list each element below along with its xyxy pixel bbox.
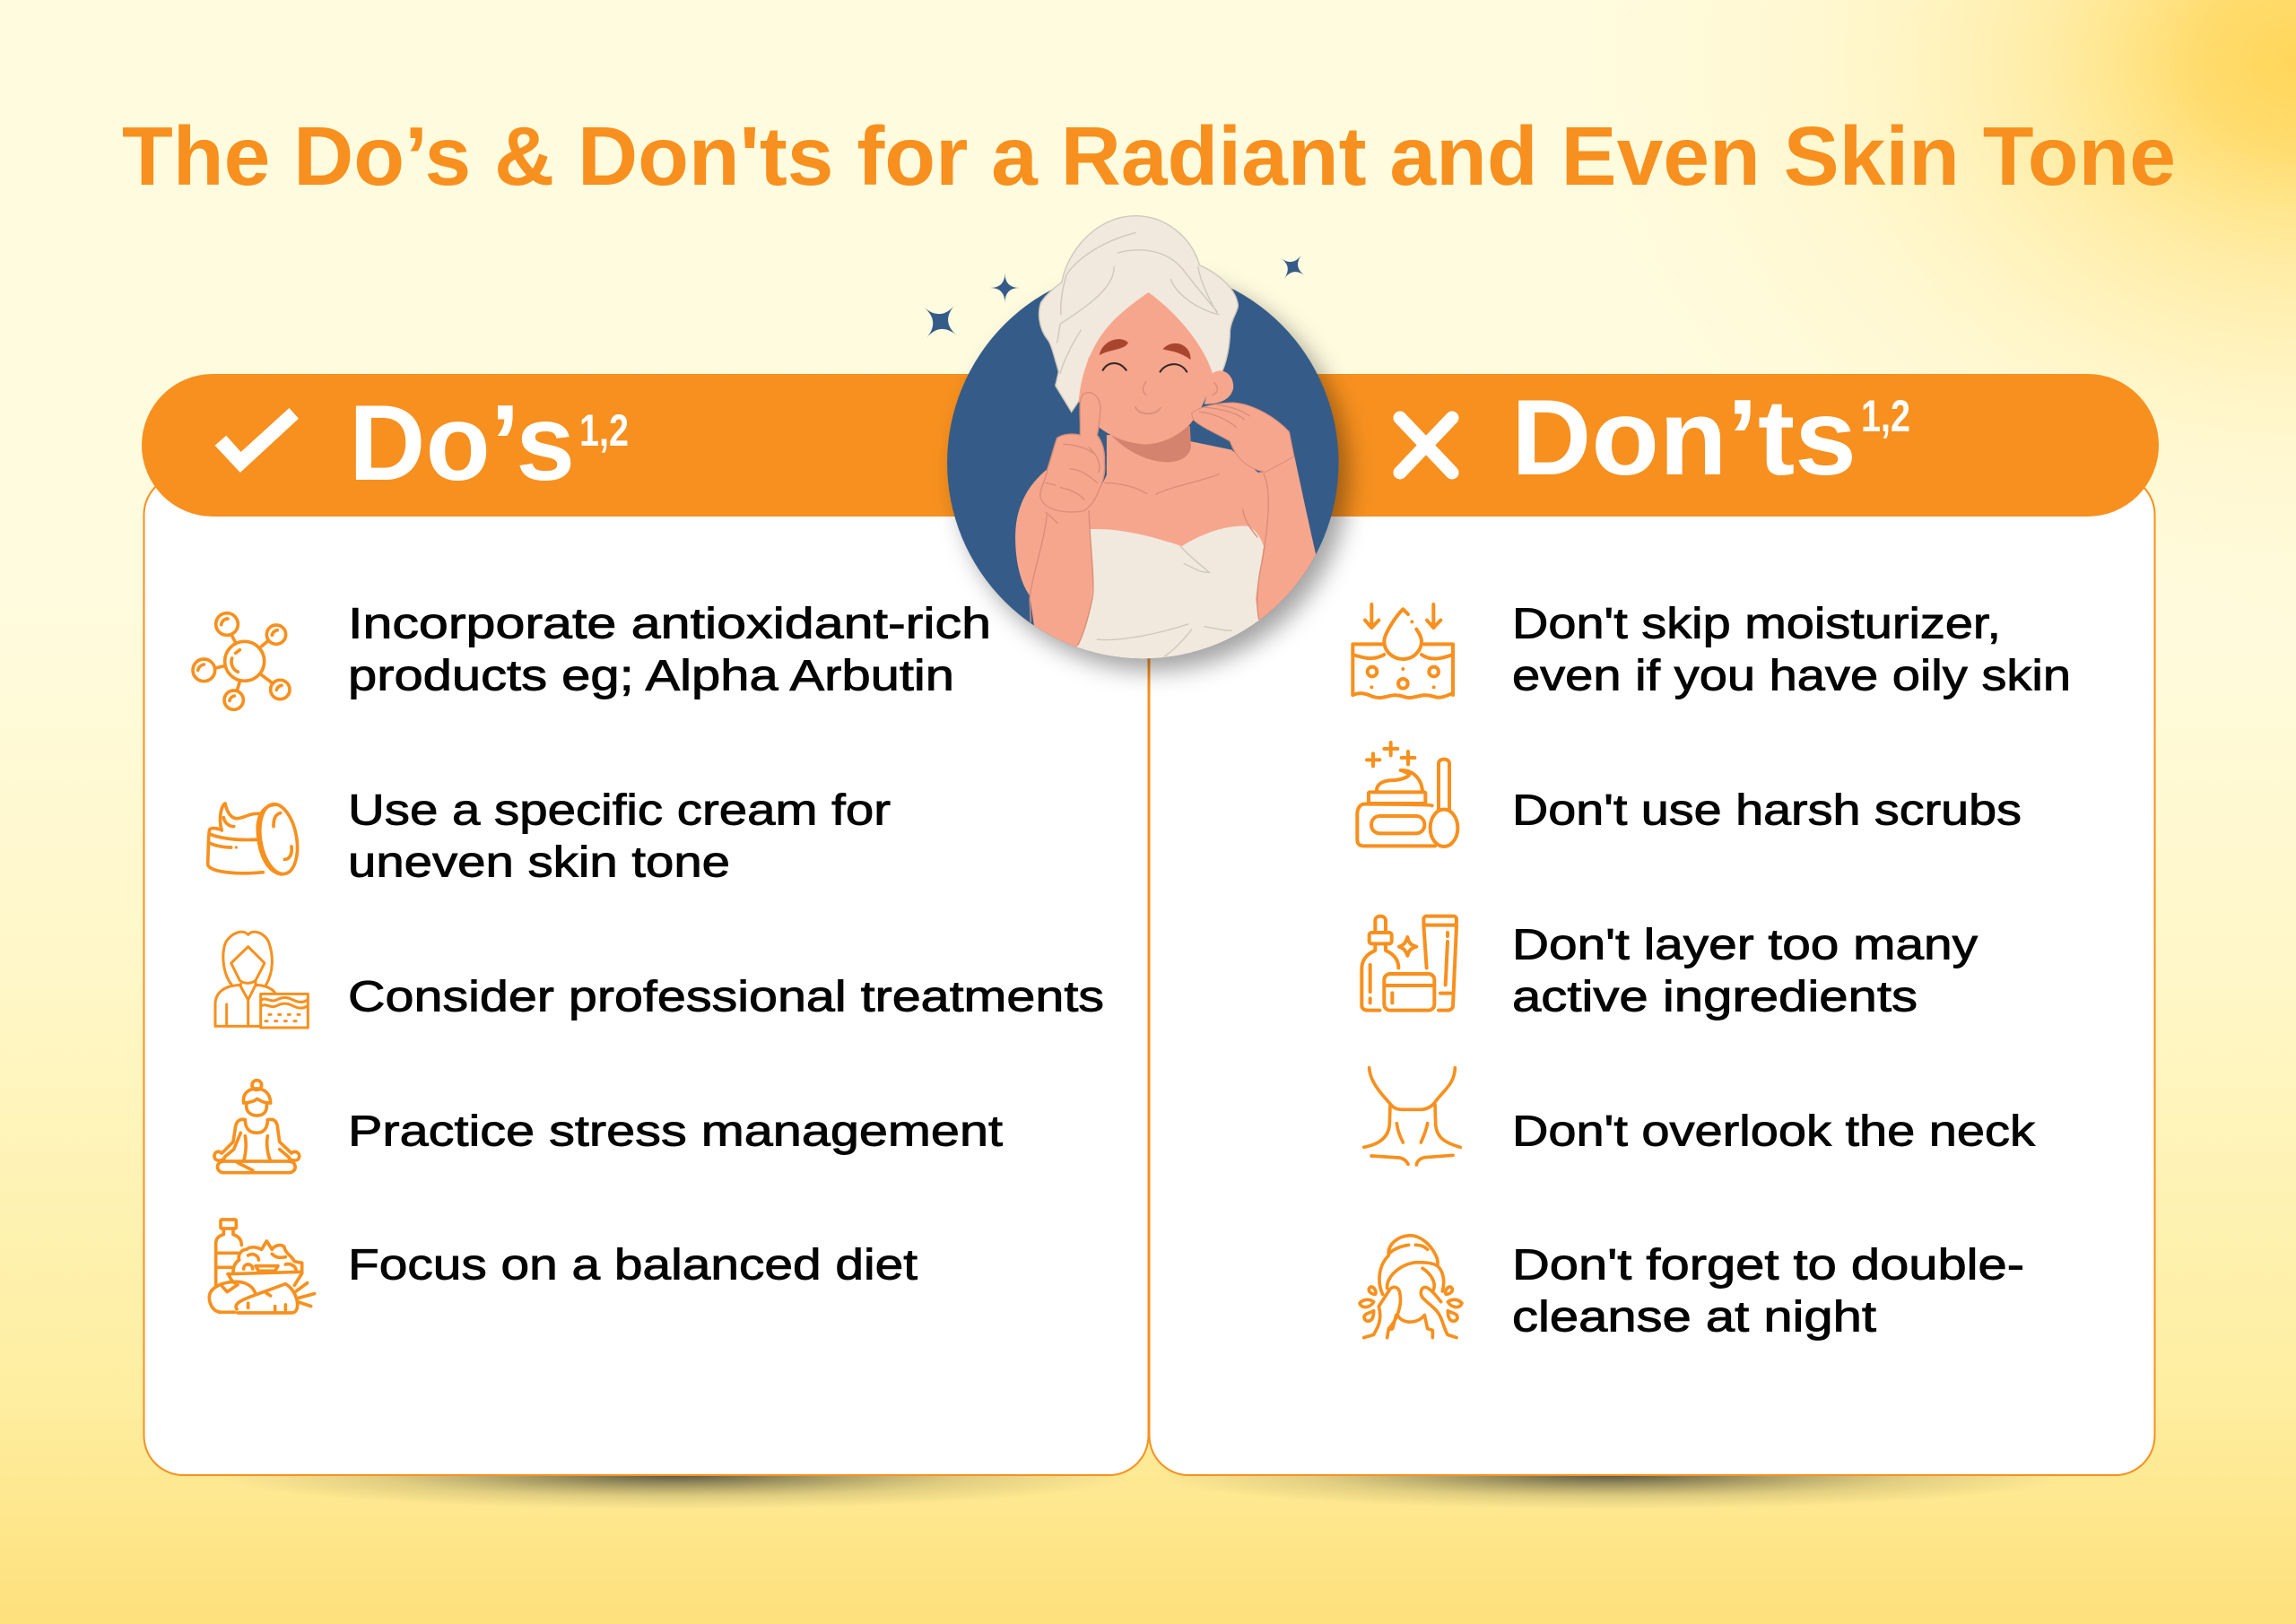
do's references: 1,2 <box>579 405 629 456</box>
icon: scrub jar and spoon <box>1357 743 1457 847</box>
item: balanced diet <box>209 1220 918 1313</box>
item: active ingredients: active ingredients <box>1512 974 1918 1020</box>
item: moisturizer <box>1352 601 2071 699</box>
towel wrap <box>1070 526 1264 666</box>
text: Consider professional treatments <box>348 974 1104 1020</box>
item: professional treatments <box>215 932 1104 1028</box>
icon: moisturized skin <box>1352 604 1453 698</box>
text: Don't skip moisturizer, <box>1512 601 2001 647</box>
icon: cream jar <box>208 801 302 877</box>
do's list <box>193 601 1104 1313</box>
don'ts header <box>1148 374 2159 517</box>
body <box>1015 432 1317 666</box>
do's heading: Do’s <box>349 383 575 503</box>
eyes <box>1103 363 1187 372</box>
sparkle stars <box>924 255 1305 338</box>
text: Don't forget to double- <box>1512 1241 2024 1290</box>
panel: don'ts card <box>1150 475 2154 1475</box>
towel folds <box>1057 233 1219 373</box>
item: double cleanse <box>1360 1236 2024 1342</box>
item: cream <box>208 787 891 886</box>
hand on cheek <box>1192 403 1294 472</box>
woman illustration <box>924 216 1349 671</box>
don'ts references: 1,2 <box>1861 391 1910 441</box>
face <box>1079 292 1213 444</box>
item: neck <box>1364 1068 2036 1165</box>
don'ts heading: Don’ts <box>1511 378 1857 498</box>
ear <box>1205 370 1233 404</box>
icon: cross mark <box>1400 418 1452 473</box>
icon: meditation <box>214 1081 300 1173</box>
title: The Do’s & Don'ts for a Radiant and Even Skin Tone <box>122 109 2176 203</box>
text: Use a specific cream for <box>348 787 891 834</box>
icon: skin professional <box>215 932 308 1028</box>
circle shadow <box>958 280 1349 671</box>
text: Don't use harsh scrubs <box>1512 787 2022 834</box>
text: Don't layer too many <box>1512 922 1978 968</box>
item: antioxidants <box>193 601 991 709</box>
item: harsh scrubs <box>1357 743 2022 847</box>
item: double cleanse: cleanse at night <box>1512 1293 1876 1342</box>
text: Incorporate antioxidant-rich <box>348 601 991 647</box>
item: cream: uneven skin tone <box>348 839 730 886</box>
eyebrows <box>1100 339 1191 360</box>
blue circle <box>947 267 1338 658</box>
text: Don't overlook the neck <box>1512 1108 2036 1155</box>
do's header <box>142 374 1157 517</box>
icon: molecule <box>193 613 290 709</box>
item: stress management <box>214 1081 1003 1173</box>
item: moisturizer: even if you have oily skin <box>1512 653 2071 699</box>
panel: do's card <box>144 475 1148 1475</box>
text: Focus on a balanced diet <box>348 1241 918 1290</box>
icon: check mark <box>215 408 299 473</box>
item: active ingredients <box>1361 916 1978 1020</box>
text: Practice stress management <box>348 1108 1003 1155</box>
towel on head <box>1039 216 1238 412</box>
neck shadow <box>1109 426 1191 462</box>
thumbs up hand <box>1040 393 1105 512</box>
icon: healthy food <box>209 1220 315 1313</box>
portrait <box>947 216 1338 666</box>
panel shadows <box>216 1441 2068 1509</box>
icon: neck <box>1364 1068 1460 1165</box>
item: antioxidants: products eg; Alpha Arbutin <box>348 653 954 699</box>
icon: layered products <box>1361 916 1457 1011</box>
icon: face wash <box>1360 1236 1462 1338</box>
don'ts list <box>1352 601 2071 1342</box>
